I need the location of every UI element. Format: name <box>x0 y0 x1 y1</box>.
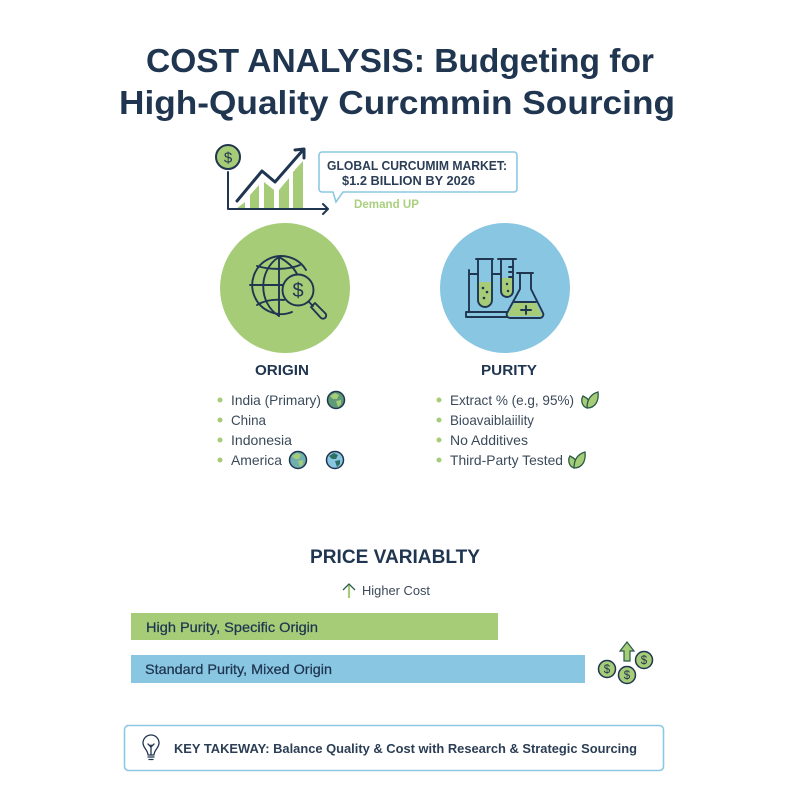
label: demand up: Demand UP <box>354 197 419 211</box>
icon: coins with up arrow: $ <box>604 664 611 676</box>
label: higher cost: Higher Cost <box>362 584 431 598</box>
icon: leaf tested <box>569 452 585 468</box>
list: origin <box>218 392 344 468</box>
chart icon: rising market demand <box>216 145 328 214</box>
icon: up arrow <box>343 584 355 598</box>
callout: global market: GLOBAL CURCUMIM MARKET: <box>327 159 507 173</box>
title <box>119 43 675 122</box>
chart icon: rising market demand: $ <box>224 150 233 166</box>
list: purity: No Additives <box>450 432 528 448</box>
bar: high purity <box>131 613 498 640</box>
list: purity: Extract % (e.g, 95%) <box>450 392 574 408</box>
icon: origin globe with magnifier on green circle: $ <box>292 280 304 302</box>
icon: globe America 1 <box>290 452 306 468</box>
bar: high purity: High Purity, Specific Origin <box>146 619 318 635</box>
list: purity: Third-Party Tested <box>450 452 563 468</box>
icon: origin globe with magnifier on green circle <box>220 223 350 353</box>
title: COST ANALYSIS: Budgeting for <box>146 43 654 80</box>
list: purity <box>436 392 598 468</box>
callout: global market: $1.2 BILLION BY 2026 <box>342 174 475 188</box>
list: origin: India (Primary) <box>231 392 321 408</box>
heading: purity: PURITY <box>481 362 537 379</box>
heading: origin: ORIGIN <box>255 362 309 379</box>
bar: standard purity: Standard Purity, Mixed Origin <box>145 661 332 677</box>
list: purity: Bioavaiblaiility <box>450 412 534 428</box>
list: origin: China <box>231 412 266 428</box>
title: High-Quality Curcmmin Sourcing <box>119 85 675 122</box>
list: origin: America <box>231 452 282 468</box>
panel: key takeaway <box>124 726 664 770</box>
heading: price variability: PRICE VARIABLTY <box>310 547 480 568</box>
icon: globe India <box>328 392 344 408</box>
icon: light bulb <box>143 735 159 760</box>
icon: coins with up arrow <box>598 642 652 684</box>
icon: coins with up arrow: $ <box>641 655 648 667</box>
bar: standard purity <box>131 655 585 683</box>
panel: key takeaway: KEY TAKEWAY: Balance Quality & Cost with Research & Strategic Sourcing <box>174 741 637 756</box>
callout: global market <box>319 152 517 202</box>
icon: coins with up arrow: $ <box>624 670 631 682</box>
icon: globe America 2 <box>326 452 344 468</box>
icon: purity test tubes and flask on blue circle <box>440 223 570 353</box>
icon: leaf extract <box>582 392 598 408</box>
list: origin: Indonesia <box>231 432 292 448</box>
